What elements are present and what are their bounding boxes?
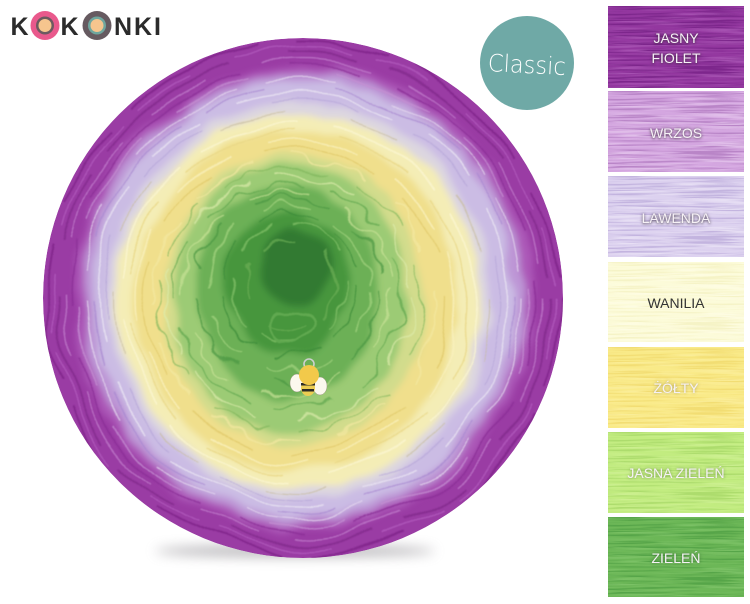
logo: KOKONKI: K — [10, 13, 29, 41]
swatch: Lawenda: LAWENDA — [642, 210, 710, 226]
badge: Classic: Classic — [487, 49, 567, 81]
bee charm — [290, 359, 327, 396]
swatch: Zieleń: ZIELEŃ — [651, 550, 700, 566]
swatch: Jasny fiolet — [608, 6, 744, 88]
swatch: Wrzos: WRZOS — [650, 125, 702, 141]
logo: KOKONKI: NKI — [114, 13, 161, 41]
swatch: Jasna zieleń — [608, 432, 744, 513]
swatch: Żółty: ŻÓŁTY — [653, 380, 699, 396]
logo: KOKONKI — [10, 11, 161, 41]
badge: Classic — [480, 16, 574, 110]
swatch: Wanilia — [608, 262, 744, 342]
swatch: Jasny fiolet: FIOLET — [651, 50, 700, 66]
logo: KOKONKI: K — [60, 13, 79, 41]
yarn cake — [43, 38, 563, 564]
swatch: Żółty — [608, 347, 744, 428]
yarn ball — [43, 38, 563, 558]
swatch: Wrzos — [608, 91, 744, 172]
cast shadow — [155, 545, 435, 557]
swatch: Jasna zieleń: JASNA ZIELEŃ — [627, 465, 725, 481]
swatch: Zieleń — [608, 517, 744, 597]
swatch: Jasny fiolet: JASNY — [653, 30, 699, 46]
swatch: Lawenda — [608, 176, 744, 257]
swatch: Wanilia: WANILIA — [647, 295, 705, 311]
yarn strands — [47, 42, 559, 554]
